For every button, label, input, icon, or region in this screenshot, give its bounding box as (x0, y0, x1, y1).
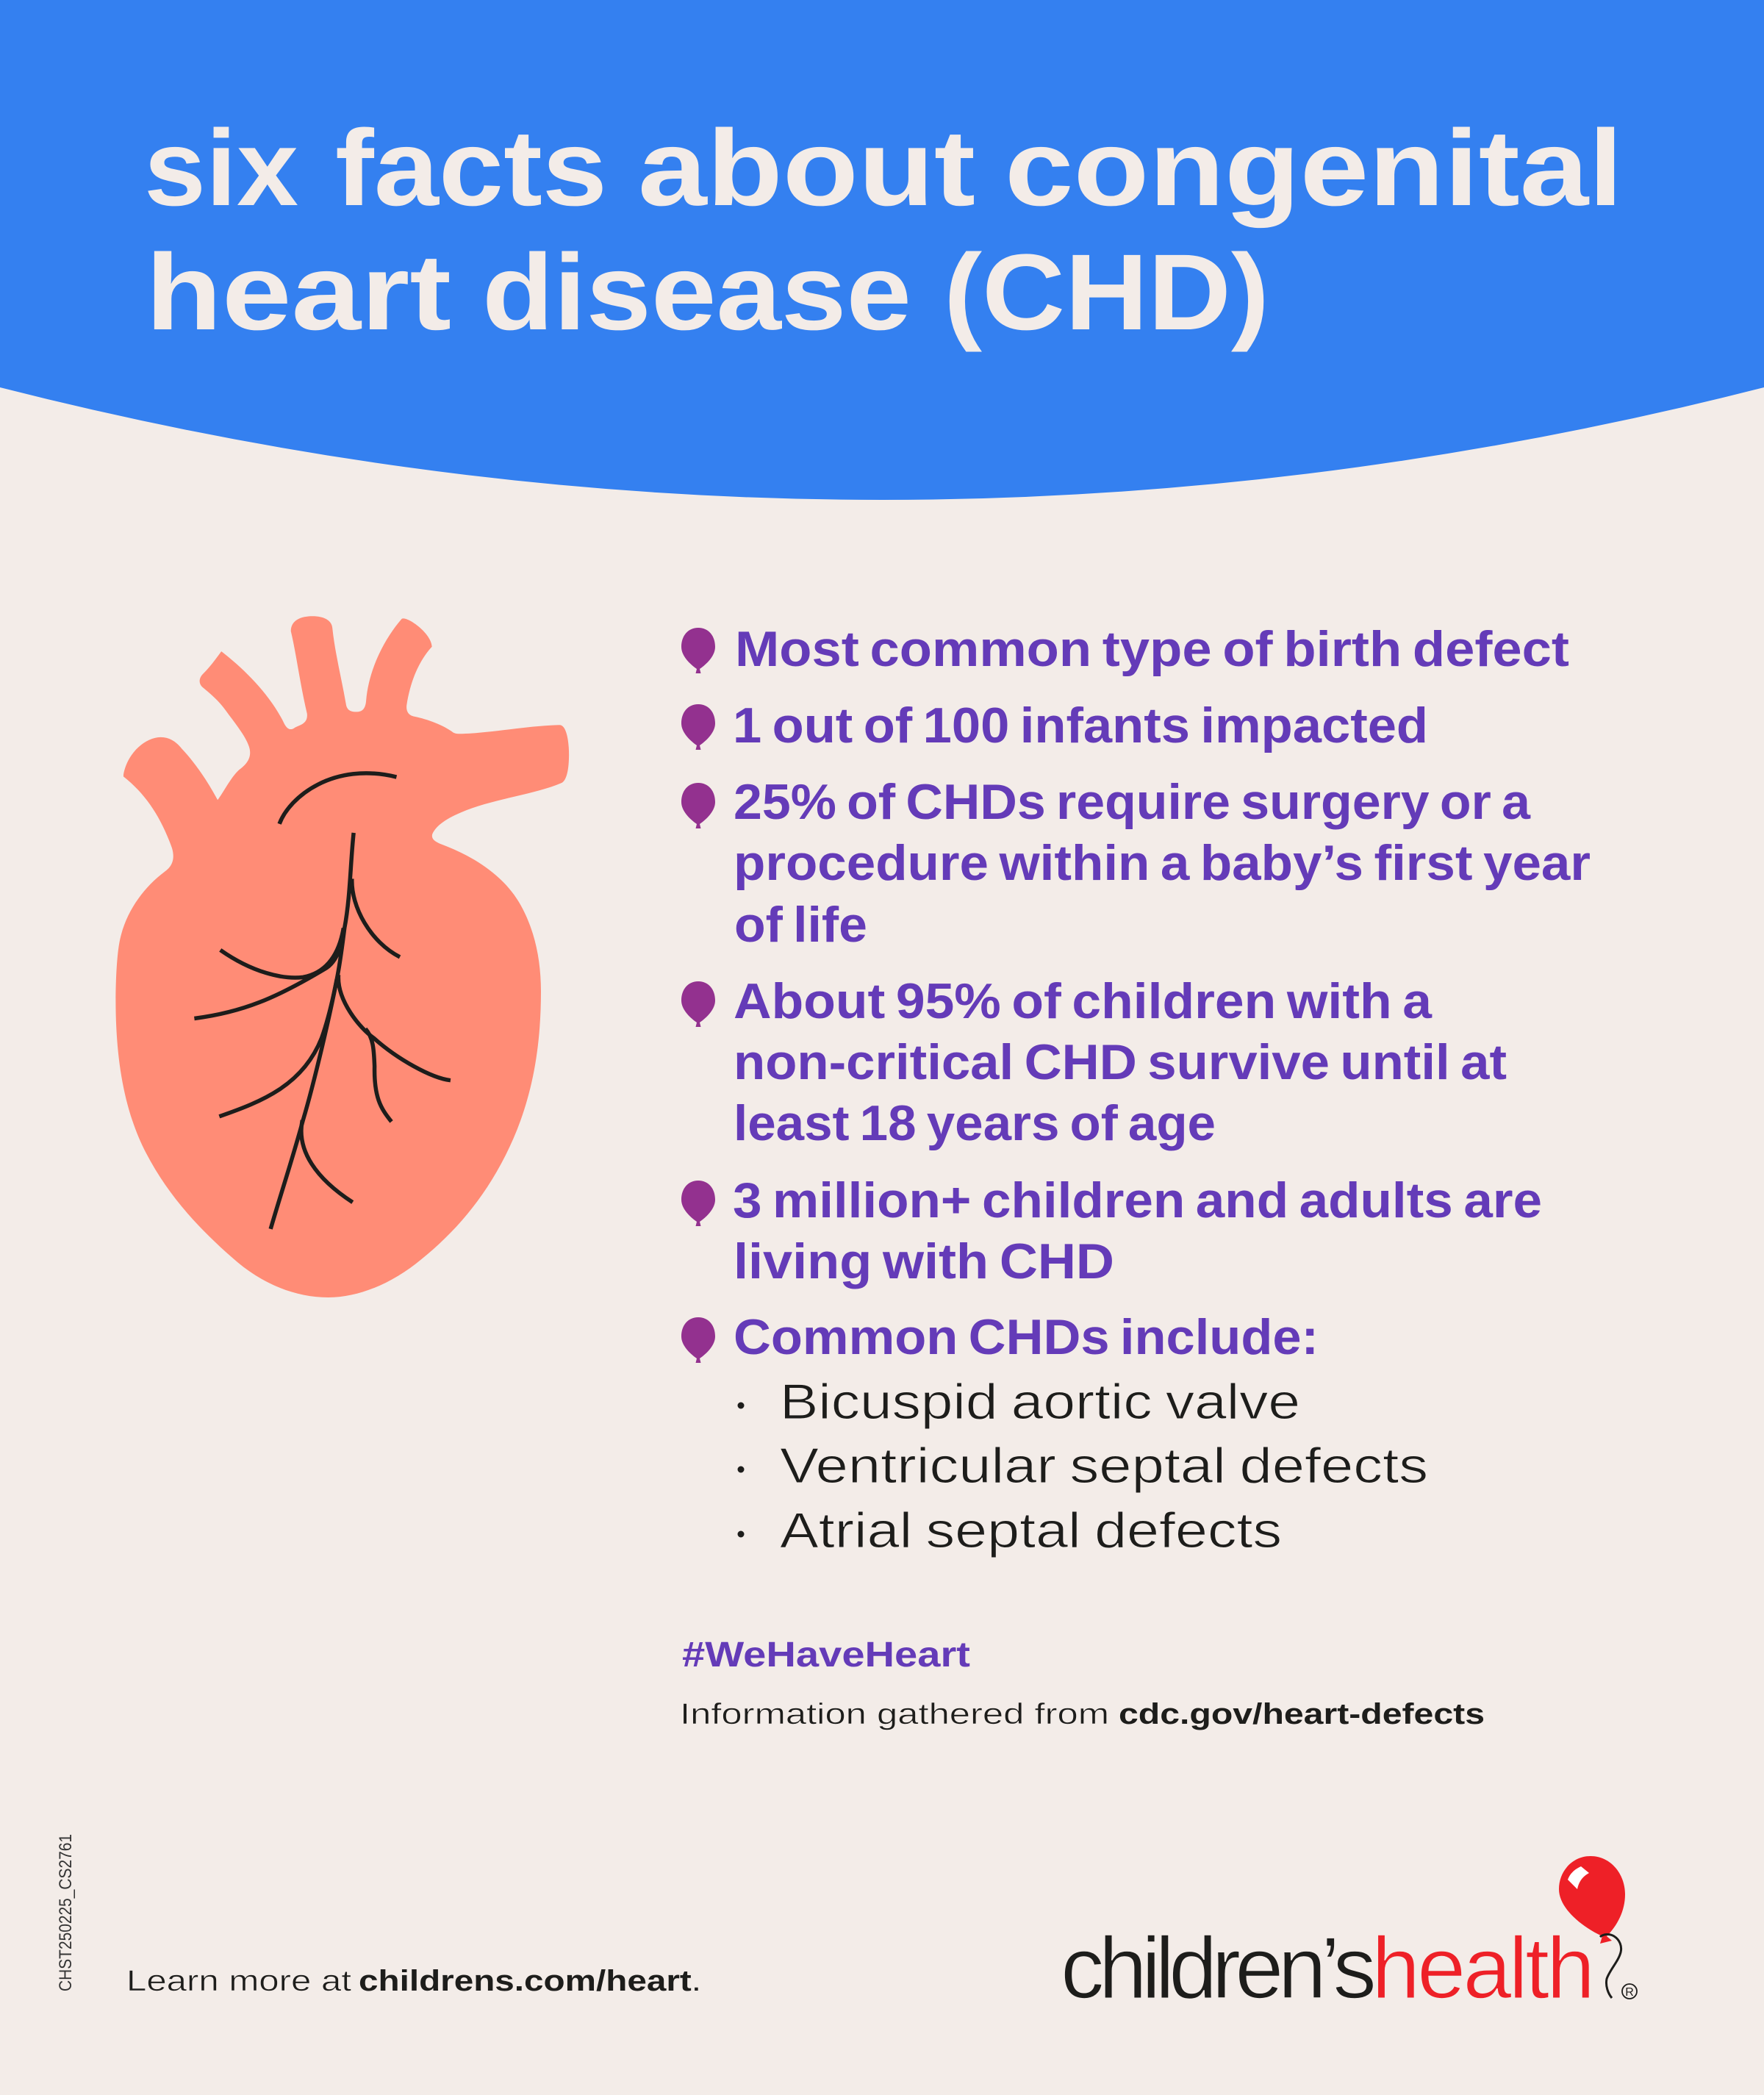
fact text (734, 774, 1591, 953)
registered mark (1622, 1984, 1637, 1999)
balloon string (1600, 1934, 1621, 1998)
logo balloon (1559, 1856, 1625, 1944)
hashtag: #WeHaveHeart (682, 1636, 970, 1675)
source line: Information gathered from (680, 1698, 1109, 1730)
fact 3 (681, 774, 1591, 953)
title: (CHD) (944, 232, 1269, 353)
title (144, 108, 1623, 353)
learn more line (126, 1965, 701, 1997)
balloon bullet (681, 981, 715, 1027)
fact text: least 18 years of age (734, 1095, 1216, 1151)
fact 1 (681, 621, 1569, 677)
heart vessels (194, 773, 451, 1229)
balloon bullet (681, 704, 715, 750)
fact text (733, 1172, 1542, 1289)
title: about (638, 108, 975, 229)
title: heart (146, 232, 451, 353)
fact 6: common CHDs (681, 1309, 1428, 1558)
header banner (0, 0, 1764, 500)
fact text: Most common type of birth defect (735, 621, 1569, 677)
source line: cdc.gov/heart-defects (1119, 1698, 1485, 1730)
learn more line: Learn more at (126, 1965, 351, 1997)
balloon bullet (681, 1181, 715, 1226)
source line (680, 1698, 1485, 1730)
fact text: 3 million+ children and adults are (733, 1172, 1542, 1228)
heart silhouette (115, 616, 569, 1297)
title: facts (335, 108, 607, 229)
fact text: non-critical CHD survive until at (734, 1034, 1507, 1090)
registered mark: R (1625, 1986, 1634, 1999)
sub-list: Atrial septal defects (780, 1503, 1282, 1558)
balloon bullet (681, 628, 715, 673)
balloon highlight (1568, 1866, 1589, 1889)
fact text: of life (734, 897, 867, 953)
balloon bullet (681, 783, 715, 828)
fact text: Common CHDs include: (734, 1309, 1319, 1365)
illustration: heart (115, 616, 569, 1297)
fact text: About 95% of children with a (734, 973, 1433, 1029)
title: six (144, 108, 298, 229)
sub-list: Ventricular septal defects (780, 1438, 1428, 1494)
fact text: living with CHD (734, 1233, 1114, 1289)
balloon bullet (681, 1317, 715, 1363)
fact 4 (681, 973, 1507, 1151)
fact text: 1 out of 100 infants impacted (733, 698, 1428, 753)
logo wordmark: health (1372, 1919, 1592, 2017)
logo wordmark (1061, 1919, 1592, 2017)
logo (1061, 1856, 1637, 2017)
learn more line: childrens.com/heart . (359, 1965, 701, 1997)
sub-list (738, 1374, 1428, 1558)
logo wordmark: children’s (1061, 1919, 1374, 2017)
fact text (734, 973, 1507, 1151)
title: congenital (1005, 108, 1623, 229)
title: disease (482, 232, 911, 353)
fact 5 (681, 1172, 1542, 1289)
job code: CHST250225_CS2761 (56, 1834, 76, 1991)
fact text: procedure within a baby’s first year (734, 835, 1591, 891)
sub-list: Bicuspid aortic valve (780, 1374, 1300, 1430)
fact 2 (681, 698, 1428, 753)
fact text: 25% of CHDs require surgery or a (734, 774, 1531, 830)
